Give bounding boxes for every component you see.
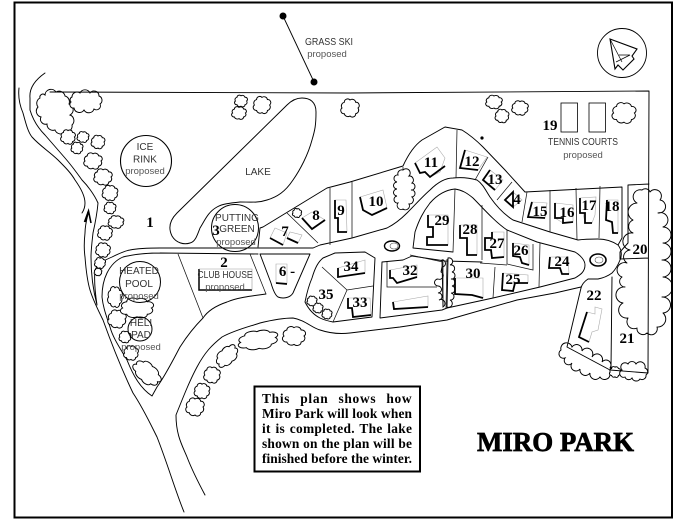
inner residential lots xyxy=(380,189,585,318)
club house xyxy=(198,269,253,293)
plot numbers: 34 xyxy=(344,259,359,275)
lot 10 tree xyxy=(394,169,415,210)
lake label: LAKE xyxy=(245,167,271,178)
club house: proposed xyxy=(205,282,245,293)
plot numbers: 26 xyxy=(514,243,529,259)
heli pad: HELI xyxy=(130,318,152,329)
south hedge xyxy=(559,343,612,379)
lake xyxy=(170,98,316,244)
putting green: GREEN xyxy=(219,224,255,235)
lot 30 hedge xyxy=(434,260,446,307)
plot numbers: 7 xyxy=(281,224,289,240)
plot numbers: 27 xyxy=(490,236,505,252)
plot numbers: 8 xyxy=(312,208,320,224)
loop road with pool and clubhouse xyxy=(102,253,266,396)
plot numbers: 17 xyxy=(582,198,597,214)
site top and right boundaries xyxy=(50,91,649,373)
plot numbers xyxy=(146,118,648,347)
lot 6 plot xyxy=(260,254,310,298)
ice rink xyxy=(120,136,172,186)
plot numbers: 21 xyxy=(620,331,634,347)
tennis courts xyxy=(548,103,618,161)
plot numbers: 16 xyxy=(560,205,575,221)
plot numbers: 13 xyxy=(488,172,502,188)
plot numbers: 29 xyxy=(434,213,450,229)
plot numbers: 22 xyxy=(586,288,602,304)
callout: it is completed. The lake xyxy=(262,421,412,436)
plot numbers: 3 xyxy=(212,223,220,239)
trees along plan xyxy=(36,89,673,416)
plot numbers: 32 xyxy=(402,263,418,279)
title: MIRO PARK xyxy=(477,427,634,457)
plot numbers: 6 - xyxy=(279,264,295,280)
big tree xyxy=(36,89,74,134)
plot numbers: 18 xyxy=(604,199,620,215)
plot numbers: 33 xyxy=(352,295,368,311)
upper residential lot boundary xyxy=(258,127,622,288)
callout xyxy=(254,386,420,472)
grass ski line: GRASS SKI xyxy=(305,37,353,48)
heated pool: proposed xyxy=(119,291,159,302)
plot numbers: 28 xyxy=(462,222,478,238)
callout: Miro Park will look when xyxy=(262,406,413,421)
heated pool: POOL xyxy=(125,279,153,290)
plot numbers: 30 xyxy=(466,266,480,282)
roundabout islands xyxy=(384,241,606,266)
heated pool: HEATED xyxy=(119,266,159,277)
plot numbers: 2 xyxy=(220,255,228,271)
callout: finished before the winter. xyxy=(262,451,412,466)
plot numbers: 35 xyxy=(318,287,334,303)
ice rink: RINK xyxy=(133,154,157,166)
plot numbers: 1 xyxy=(146,215,154,231)
tennis courts: proposed xyxy=(563,150,603,161)
plot numbers: 25 xyxy=(506,272,520,288)
putting green xyxy=(212,204,259,252)
plot numbers: 12 xyxy=(464,154,480,170)
plot numbers: 10 xyxy=(368,194,384,210)
plot numbers: 15 xyxy=(532,204,548,220)
club house: CLUB HOUSE xyxy=(198,270,253,281)
icon: north compass xyxy=(598,28,646,78)
long tree xyxy=(70,90,102,113)
arrow on access road xyxy=(84,211,91,223)
plot numbers: 4 xyxy=(513,192,521,208)
buildings xyxy=(270,147,618,342)
heli pad xyxy=(121,317,161,353)
heated pool xyxy=(119,262,160,302)
site plan roads and plot lines xyxy=(19,73,673,512)
plot numbers: 19 xyxy=(542,118,558,134)
plot numbers: 9 xyxy=(337,203,345,219)
putting green: PUTTING xyxy=(215,213,259,224)
putting green: proposed xyxy=(216,237,256,248)
road: western access road xyxy=(19,73,581,512)
plot numbers: 11 xyxy=(424,155,438,171)
plot numbers: 24 xyxy=(554,254,570,270)
heli pad: proposed xyxy=(121,342,161,353)
grass ski line: proposed xyxy=(307,49,347,60)
heli pad: PAD xyxy=(131,330,151,341)
callout: shown on the plan will be xyxy=(262,436,412,451)
lot 20 and 21 tall tree xyxy=(616,189,673,335)
plot numbers: 20 xyxy=(632,242,648,258)
grass ski line xyxy=(280,12,353,86)
lots 33 to 35 block xyxy=(305,252,375,322)
ice rink: proposed xyxy=(125,166,165,177)
tennis courts: TENNIS COURTS xyxy=(548,137,618,148)
callout: This plan shows how xyxy=(262,391,412,406)
ice rink: ICE xyxy=(137,142,154,153)
